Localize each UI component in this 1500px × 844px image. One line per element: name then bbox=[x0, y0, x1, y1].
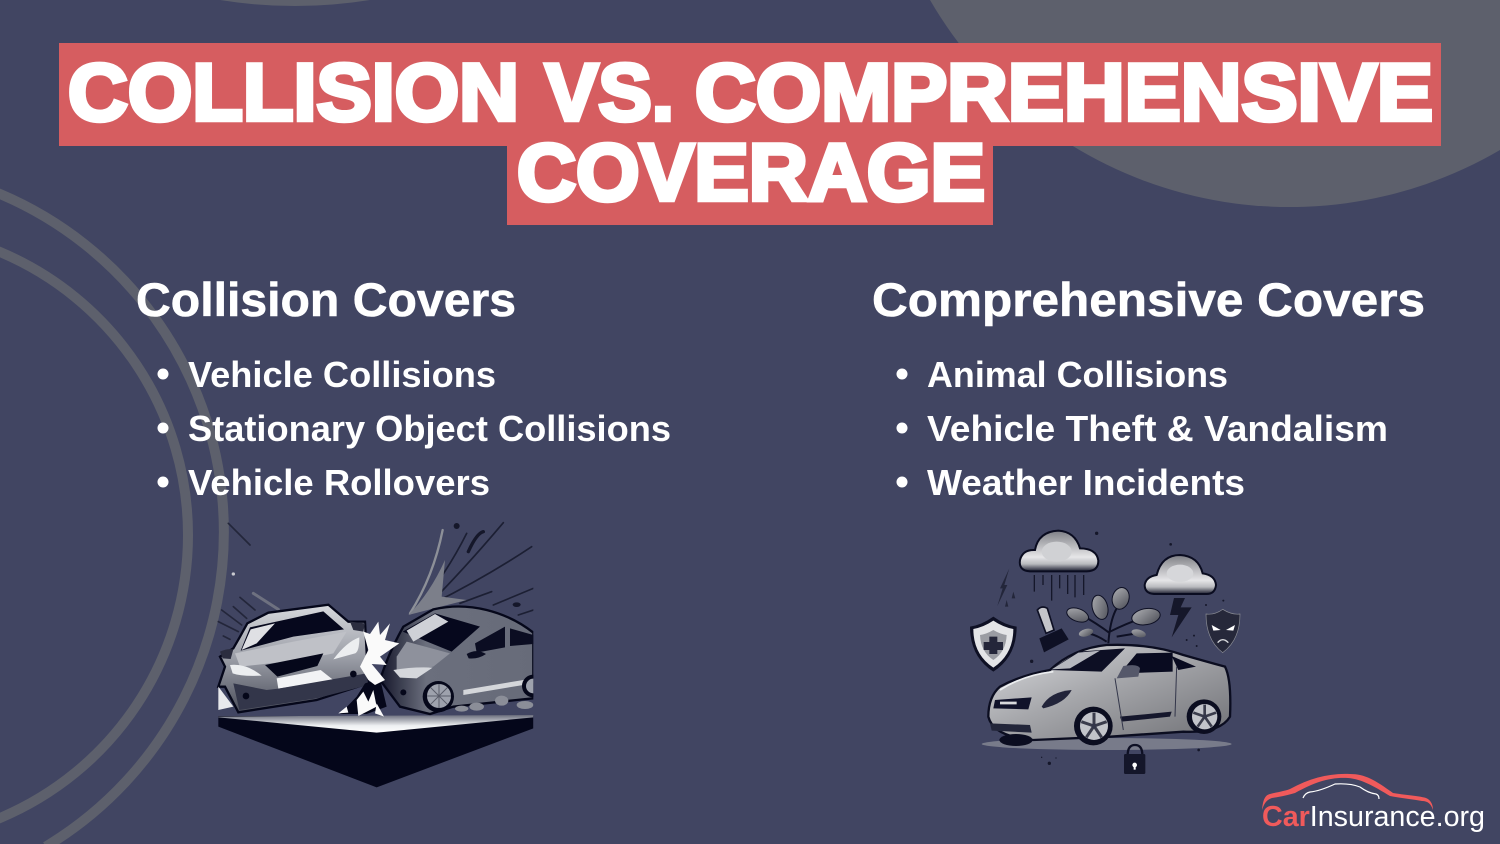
silver car bbox=[988, 645, 1230, 746]
cloud right bbox=[1145, 555, 1216, 594]
list: comprehensive items: Weather Incidents bbox=[927, 462, 1245, 503]
title: COLLISION bbox=[68, 48, 519, 138]
logo car window line bbox=[1303, 784, 1379, 799]
right car bbox=[380, 606, 545, 714]
list: comprehensive items: Animal Collisions bbox=[927, 354, 1228, 395]
impact burst bbox=[338, 622, 399, 717]
heading: comprehensive covers: Comprehensive Covers bbox=[872, 273, 1425, 326]
background ring inner bbox=[0, 252, 188, 818]
title: COMPREHENSIVE bbox=[695, 48, 1433, 138]
background circle top edge bbox=[220, 0, 370, 6]
list: collision items: Stationary Object Collisions bbox=[188, 408, 671, 449]
logo: CarInsurance.org bbox=[1262, 774, 1485, 833]
list: collision items: Vehicle Rollovers bbox=[188, 462, 490, 503]
logo car roofline bbox=[1262, 774, 1433, 810]
ground shadow bbox=[982, 738, 1232, 750]
illustration: car with weather and theft hazards bbox=[970, 531, 1240, 774]
lightning bolt bbox=[1170, 598, 1192, 637]
base wedge bbox=[218, 716, 533, 787]
leaves plant bbox=[1065, 586, 1162, 643]
background ring outer bbox=[0, 194, 224, 844]
stamp tool bbox=[1037, 607, 1069, 652]
list: collision items bbox=[158, 354, 671, 503]
small bolt and drops bbox=[997, 568, 1015, 607]
logo wordmark: CarInsurance.org bbox=[1262, 801, 1485, 833]
heading: collision covers: Collision Covers bbox=[136, 273, 516, 326]
list: collision items: Vehicle Collisions bbox=[188, 354, 496, 395]
title bbox=[59, 43, 1441, 225]
sparkles bbox=[1030, 532, 1224, 765]
list: comprehensive items bbox=[896, 354, 1388, 503]
cloud left bbox=[1020, 531, 1098, 571]
padlock bbox=[1124, 745, 1145, 774]
debris lines bbox=[218, 523, 533, 639]
mask shield bbox=[1206, 609, 1240, 653]
wheels bbox=[1074, 707, 1113, 745]
title: COVERAGE bbox=[517, 128, 985, 218]
title: VS. bbox=[545, 48, 674, 138]
left car bbox=[218, 605, 368, 712]
rain bbox=[1034, 575, 1084, 601]
list: comprehensive items: Vehicle Theft & Vandalism bbox=[927, 408, 1388, 449]
shield with cross bbox=[970, 617, 1017, 672]
illustration: two cars colliding bbox=[218, 523, 545, 787]
background circle top right bbox=[930, 0, 1500, 207]
